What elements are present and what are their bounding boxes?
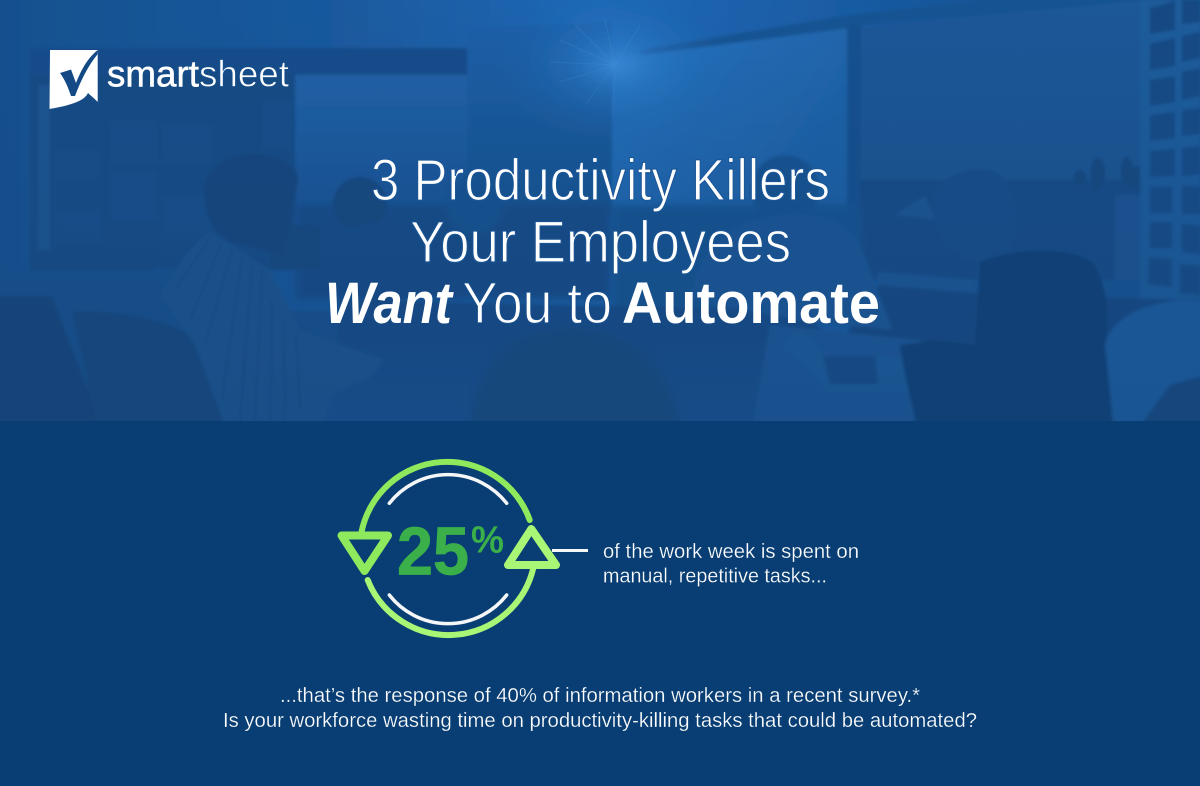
- logo wordmark: smartsheet: [107, 54, 290, 94]
- closing text: ...that’s the response of 40% of information workers in a recent survey.*: [280, 684, 920, 707]
- table right: [764, 326, 920, 406]
- stat: percent sign: %: [471, 520, 504, 562]
- ceiling beam: [641, 8, 938, 54]
- stat: 25: 25: [397, 514, 469, 590]
- chair left: [74, 312, 222, 421]
- down arrowhead: [342, 536, 388, 571]
- stat description: [603, 540, 859, 588]
- center column: [467, 22, 612, 215]
- binders right: [1104, 300, 1200, 421]
- laptop: [780, 330, 912, 392]
- title: [325, 148, 880, 336]
- person left: [206, 163, 298, 220]
- icon: logo flag with checkmark: [50, 50, 98, 109]
- logo: smartsheet: [50, 50, 290, 109]
- title: Your Employees: [410, 210, 791, 275]
- panel: lower navy band: [0, 421, 1200, 786]
- soft tone veil: [286, 65, 1200, 421]
- right window: [862, 28, 926, 180]
- stat description: manual, repetitive tasks...: [603, 564, 827, 588]
- sun glow: [540, 22, 698, 116]
- panel: photo header: [0, 0, 1200, 440]
- city horizon: [860, 180, 1148, 280]
- top arc: [362, 462, 530, 532]
- closing text: [223, 684, 977, 732]
- title: Automate: [622, 271, 880, 336]
- connector line: [552, 549, 588, 552]
- window sill right: [879, 274, 927, 278]
- icon: cycle arrows with 25 percent: [342, 462, 556, 635]
- person center: [447, 175, 503, 235]
- closing text: Is your workforce wasting time on productivity-killing tasks that could be automated?: [223, 709, 977, 732]
- bottom arc: [368, 568, 533, 635]
- title: You to: [462, 271, 612, 336]
- window center-left: [296, 76, 466, 202]
- left window wall: [30, 75, 295, 270]
- title: 3 Productivity Killers: [371, 148, 830, 213]
- right building shelves: [1139, 2, 1198, 196]
- window column: [846, 25, 861, 206]
- window center: [695, 29, 846, 123]
- table left: [293, 311, 338, 421]
- person right-center polo: [753, 154, 819, 206]
- stat description: of the work week is spent on: [603, 540, 859, 563]
- up arrowhead: [508, 529, 556, 565]
- sun rays: [550, 20, 640, 115]
- inner white arcs: [389, 475, 507, 503]
- person right: [932, 169, 1016, 262]
- upper wall band: [94, 47, 468, 76]
- chair far left: [0, 296, 96, 421]
- title: Want: [325, 271, 454, 336]
- table center: [340, 300, 821, 421]
- person mid-left: [333, 176, 387, 213]
